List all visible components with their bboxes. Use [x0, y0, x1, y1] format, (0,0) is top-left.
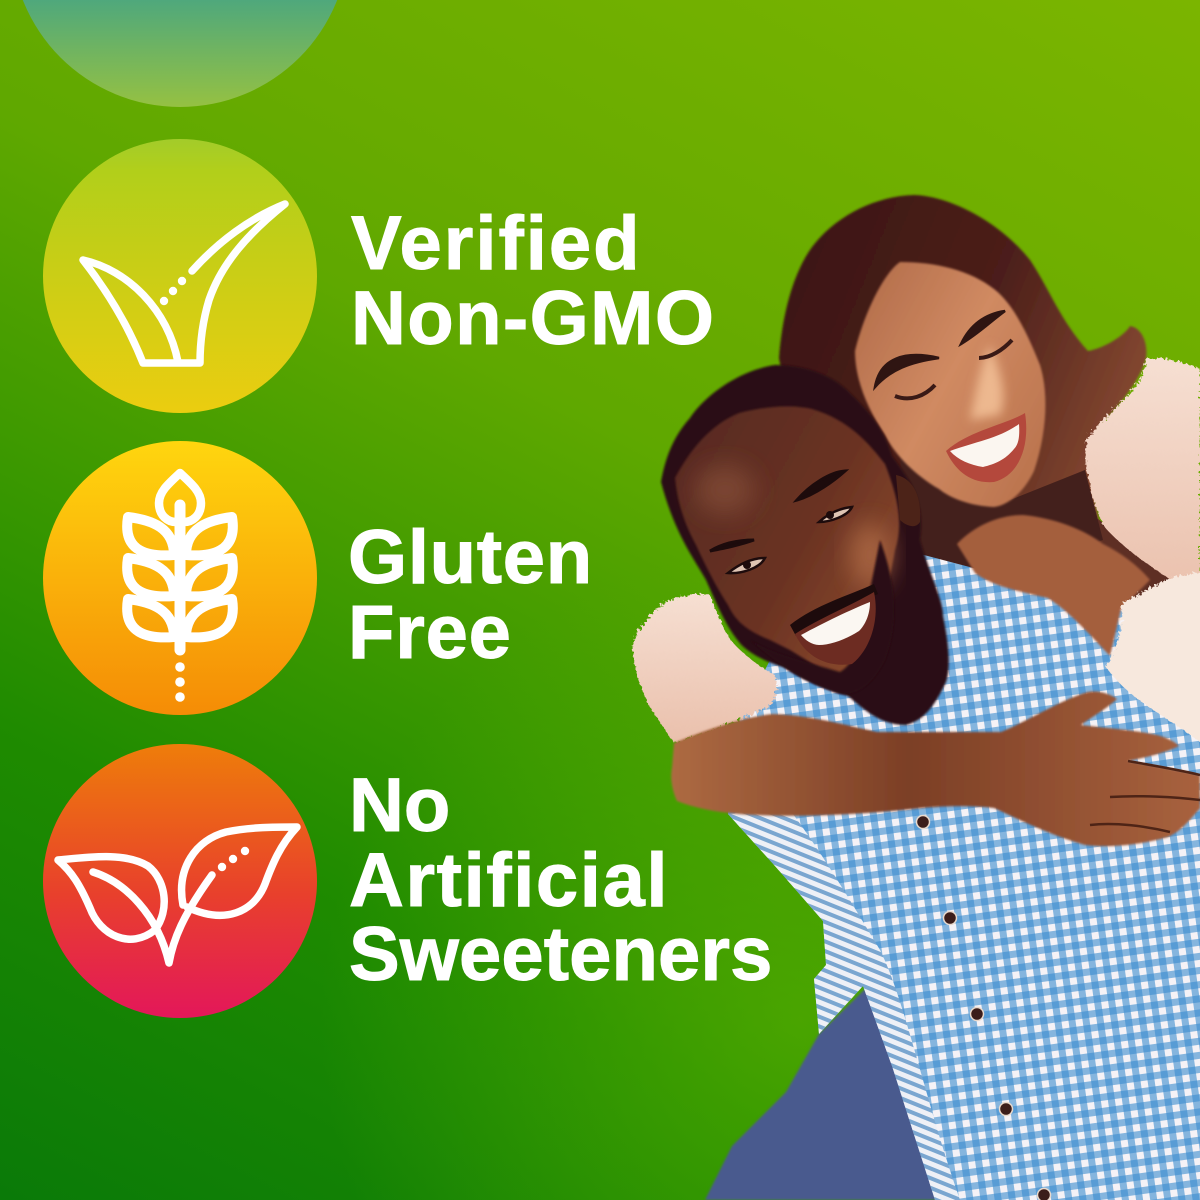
- woman's hair: [779, 195, 1146, 560]
- label: Verified Non-GMO: Non-GMO: [351, 276, 715, 361]
- woman's neck shadow: [900, 450, 1103, 575]
- label: No Artificial Sweeteners: Artificial: [349, 838, 669, 922]
- man's eyes and brows: [797, 471, 845, 500]
- label: Verified Non-GMO: [350, 201, 715, 361]
- photo: smiling couple piggyback: [633, 195, 1200, 1200]
- label: No Artificial Sweeteners: Sweeteners: [349, 912, 772, 997]
- label: Verified Non-GMO: Verified: [351, 201, 642, 286]
- badge: gluten free wheat icon: [43, 441, 317, 715]
- label: Gluten Free: Gluten: [348, 515, 593, 600]
- left sweater sleeve: [633, 594, 776, 743]
- shadow behind the woman's arm: [1085, 510, 1200, 640]
- woman's forearm: [957, 515, 1150, 656]
- label: Gluten Free: Free: [348, 590, 512, 675]
- shirt side folds: [728, 810, 960, 1200]
- label: No Artificial Sweeteners: No: [349, 763, 450, 848]
- woman's upper sweater sleeve: [1086, 358, 1200, 600]
- jeans: [705, 988, 960, 1200]
- woman's face: [855, 262, 1045, 507]
- man's arm and hand: [671, 692, 1200, 846]
- shirt buttons: [916, 816, 1050, 1200]
- man's head and beard: [661, 365, 949, 725]
- label: Gluten Free: [348, 515, 593, 675]
- badge: verified non-GMO check icon: [43, 139, 317, 413]
- man's moustache and smile: [790, 584, 878, 636]
- gingham shirt: [728, 510, 1200, 1200]
- label: No Artificial Sweeteners: [349, 763, 772, 997]
- badge: cropped teal circle: [11, 0, 349, 107]
- badge: no artificial sweeteners leaves icon: [43, 744, 317, 1018]
- man's beard: [750, 540, 894, 694]
- lower sweater sleeve: [1106, 572, 1200, 745]
